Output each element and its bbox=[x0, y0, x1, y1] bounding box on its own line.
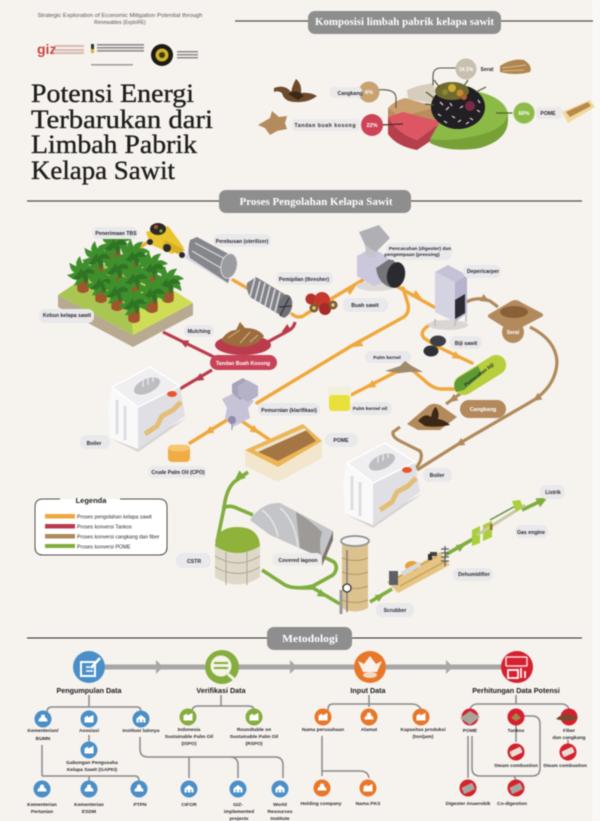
label: Covered lagoon bbox=[272, 553, 322, 566]
label: Pencacahan: pengempaan (pressing) bbox=[384, 252, 440, 258]
legend row: tan: Proses konversi cangkang dan fiber bbox=[77, 534, 160, 540]
node: Steam combustion 2 bbox=[543, 744, 587, 769]
heading: Proses bbox=[27, 190, 582, 213]
node: GIZ projects: implemented bbox=[224, 809, 254, 815]
node: GAPKI: Kelapa Sawit (GAPKI) bbox=[67, 767, 118, 773]
node: CIFOR: CIFOR bbox=[181, 802, 197, 808]
node: RSPO: Roundtable on bbox=[237, 727, 271, 733]
label: Perebusan: Perebusan (sterilizer) bbox=[216, 239, 269, 245]
logos bbox=[37, 41, 198, 66]
label: Boiler right bbox=[423, 468, 452, 482]
icon: tandan buah kosong bbox=[258, 111, 287, 135]
label: Crude Palm Oil bbox=[148, 466, 206, 478]
label: Boiler left: Boiler bbox=[87, 441, 101, 447]
label: Penerimaan TBS: Penerimaan TBS bbox=[95, 231, 137, 237]
label: Perebusan bbox=[213, 234, 271, 247]
legend: Legenda bbox=[76, 496, 107, 505]
node: Co-digestion bbox=[497, 780, 527, 807]
node: PTPN: PTPN bbox=[133, 802, 147, 808]
icon: buah sawit bbox=[306, 292, 338, 315]
pie chart: waste composition bbox=[258, 58, 595, 150]
node: Digester Anaerobik: Digester Anaerobik bbox=[446, 801, 491, 807]
heading: Proses: Proses Pengolahan Kelapa Sawit bbox=[240, 197, 393, 208]
tankos slice bbox=[388, 112, 441, 150]
label: Scrubber: Scrubber bbox=[384, 608, 406, 614]
node: Kapasitas produksi: (ton/jam) bbox=[413, 734, 434, 740]
node: POME: POME bbox=[463, 728, 478, 734]
icon: palm kernel pile bbox=[385, 361, 423, 373]
dehumidifier platform bbox=[387, 546, 450, 593]
callout: Tandan buah kosong bbox=[292, 114, 403, 136]
node: Kementerian Pertanian bbox=[27, 780, 57, 815]
node: Tankos: Tankos bbox=[508, 728, 525, 734]
node: CIFOR bbox=[180, 780, 198, 808]
node: Alamat bbox=[360, 708, 378, 733]
node: Institusi lainnya: Institusi lainnya bbox=[123, 728, 160, 734]
node: Fiber dan cangkang: Fiber bbox=[563, 728, 575, 734]
boiler right bbox=[343, 443, 422, 528]
tankos node: Tandan Buah Kosong bbox=[216, 361, 270, 367]
title: Potensi Energi bbox=[31, 78, 194, 108]
node: Kementerian Pertanian: Kementerian bbox=[27, 802, 57, 808]
callout: Tandan buah kosong: 22% bbox=[366, 123, 378, 129]
legend row: green: Proses konversi POME bbox=[77, 544, 131, 550]
label: Pemipilan: Pemipilan (thresher) bbox=[279, 277, 329, 283]
title: Terbarukan dari bbox=[31, 104, 213, 134]
callout: Cangkang: 6% bbox=[365, 90, 373, 96]
node: WRI bbox=[267, 780, 293, 821]
label: Crude Palm Oil: Crude Palm Oil (CPO) bbox=[151, 470, 205, 476]
icon: calculation bbox=[501, 651, 533, 683]
title: Limbah Pabrik bbox=[31, 129, 198, 159]
node: GIZ projects: GIZ- bbox=[233, 802, 243, 808]
machine: thresher bbox=[247, 277, 294, 319]
title: Kelapa Sawit bbox=[31, 155, 176, 185]
methodology: Input Data: Input Data bbox=[350, 686, 387, 695]
label: Depericarper bbox=[463, 265, 501, 278]
node: Kementerian/BUMN bbox=[28, 710, 59, 742]
label: Scrubber bbox=[376, 603, 414, 617]
methodology: Perhitungan Data Potensi bbox=[446, 651, 587, 807]
heading: Komposisi: Komposisi limbah pabrik kelapa sawit bbox=[315, 17, 495, 28]
label: Pencacahan bbox=[384, 243, 452, 260]
label: Palm kernel bbox=[365, 351, 411, 363]
label: Buah sawit: Buah sawit bbox=[351, 303, 379, 309]
icon: verification bbox=[205, 650, 239, 684]
green flows bbox=[217, 470, 550, 604]
methodology: Pengumpulan Data: Pengumpulan Data bbox=[56, 686, 123, 695]
node: Tankos bbox=[508, 708, 525, 734]
label: Listrik: Listrik bbox=[545, 490, 561, 496]
covered lagoon bbox=[250, 503, 333, 566]
pill: Pemecahan biji bbox=[450, 351, 510, 399]
node: Co-digestion: Co-digestion bbox=[497, 801, 527, 807]
label: Palm kernel oil: Palm kernel oil bbox=[353, 406, 388, 412]
cangkang node: Cangkang bbox=[470, 407, 496, 413]
machine: digester bbox=[356, 225, 408, 291]
node: ISPO: (ISPO) bbox=[182, 741, 197, 747]
node: Kementerian ESDM: ESDM bbox=[82, 809, 96, 815]
label: Pemipilan bbox=[276, 272, 333, 285]
label: Boiler right: Boiler bbox=[430, 473, 444, 479]
methodology arrows bbox=[105, 660, 502, 674]
node: Kementerian Pertanian: Pertanian bbox=[31, 809, 53, 815]
legend row: red: Proses konversi Tankos bbox=[77, 524, 132, 530]
logo: giz: giz bbox=[37, 41, 56, 57]
node: RSPO bbox=[230, 708, 279, 747]
icon: input bbox=[354, 651, 386, 683]
label: Buah sawit bbox=[343, 298, 388, 312]
heading: Metodologi: Metodologi bbox=[282, 634, 338, 645]
node: Steam combustion 1 bbox=[494, 744, 538, 769]
label: Mulching: Mulching bbox=[188, 329, 210, 335]
gas engine bbox=[472, 500, 525, 546]
node: Institusi lainnya bbox=[123, 710, 160, 734]
CSTR tank bbox=[215, 527, 260, 585]
plantation: Kebun kelapa sawit bbox=[39, 227, 193, 347]
label: Biji sawit: Biji sawit bbox=[455, 341, 478, 347]
callout: Cangkang: Cangkang bbox=[337, 91, 363, 97]
label: Penerimaan TBS bbox=[92, 227, 138, 239]
callout: Serat: 14.1% bbox=[459, 67, 474, 73]
label: Palm kernel: Palm kernel bbox=[373, 355, 401, 361]
pome slice bbox=[430, 90, 508, 150]
label: Palm kernel oil bbox=[350, 402, 392, 415]
icon: data collection bbox=[73, 651, 105, 683]
label: CSTR: CSTR bbox=[187, 559, 201, 565]
node: PTPN bbox=[130, 780, 148, 808]
node: Steam combustion 2: Steam combustion bbox=[543, 763, 587, 769]
label: Biji sawit bbox=[450, 336, 482, 349]
legend row: orange: Proses pengolahan kelapa sawit bbox=[77, 514, 152, 520]
red flows bbox=[163, 322, 295, 390]
node: Kementerian/BUMN: BUMN bbox=[36, 736, 51, 742]
node: RSPO: Sustainable Palm Oil bbox=[230, 734, 279, 740]
label: Depericarper: Depericarper bbox=[467, 269, 499, 275]
serat node bbox=[490, 302, 541, 343]
label: POME bbox=[325, 433, 358, 447]
process flow lines bbox=[127, 242, 557, 604]
node: GAPKI bbox=[66, 742, 118, 773]
heading: Metodologi bbox=[27, 627, 582, 650]
label: Pencacahan: Pencacahan (digester) dan bbox=[389, 246, 451, 252]
title bbox=[31, 78, 213, 185]
node: ISPO: Indonesia bbox=[178, 727, 201, 733]
label: Boiler left bbox=[80, 435, 110, 449]
plantation: Kebun kelapa sawit: Kebun kelapa sawit bbox=[43, 313, 91, 319]
methodology: Pengumpulan Data bbox=[27, 651, 293, 821]
node: Fiber dan cangkang: dan cangkang bbox=[553, 735, 585, 741]
node: Fiber dan cangkang bbox=[553, 708, 585, 741]
logo: giz bbox=[37, 41, 84, 57]
callout: POME: 60% bbox=[518, 111, 530, 117]
node: Digester Anaerobik bbox=[446, 780, 491, 807]
node: Asosiasi bbox=[79, 710, 100, 734]
serat node: Serat bbox=[507, 330, 520, 336]
logo: ministry emblem bbox=[151, 44, 198, 66]
icon: biji sawit bbox=[424, 336, 446, 356]
node: Kapasitas produksi: Kapasitas produksi bbox=[400, 727, 446, 733]
label: Pemurnian bbox=[258, 403, 320, 416]
methodology: Verifikasi Data: Verifikasi Data bbox=[196, 686, 247, 695]
palm fruit bunch bbox=[425, 80, 486, 129]
header: project name: Strategic Exploration of Economic Mitigation Potential through bbox=[38, 13, 203, 19]
callout: POME bbox=[496, 100, 595, 124]
serat slice bbox=[407, 83, 436, 104]
node: Kapasitas produksi bbox=[400, 708, 446, 740]
node: Asosiasi: Asosiasi bbox=[79, 728, 100, 734]
heading: Komposisi bbox=[235, 11, 593, 34]
node: Alamat: Alamat bbox=[361, 727, 378, 733]
callout: POME: POME bbox=[540, 111, 556, 117]
label: Gas engine bbox=[515, 525, 548, 538]
POME pond bbox=[245, 424, 322, 482]
label: Listrik bbox=[540, 485, 565, 499]
label: CSTR bbox=[176, 553, 211, 568]
machine: sterilizer bbox=[185, 237, 239, 284]
legend bbox=[35, 496, 167, 555]
node: Kementerian ESDM: Kementerian bbox=[74, 802, 104, 808]
node: Holding company bbox=[300, 780, 342, 807]
pill: Pemecahan biji: Pemecahan biji bbox=[463, 362, 496, 388]
machine: truck bbox=[146, 223, 185, 258]
callout: Serat bbox=[433, 58, 531, 85]
methodology: Input Data bbox=[300, 651, 446, 807]
label: Pemurnian: Pemurnian (klarifikasi) bbox=[261, 408, 317, 414]
logo: German ministry bbox=[91, 44, 144, 66]
icon: palm kernel oil glass bbox=[328, 387, 351, 411]
node: GIZ projects bbox=[224, 780, 254, 821]
icon: CPO cup bbox=[168, 444, 190, 462]
scrubber column bbox=[341, 536, 369, 614]
node: Nama PKS: Nama PKS bbox=[356, 801, 381, 807]
tankos node bbox=[210, 322, 277, 370]
node: Nama perusahaan bbox=[302, 708, 344, 733]
machine: depericarper bbox=[428, 265, 468, 330]
callout: Serat: Serat bbox=[481, 67, 494, 73]
header: project name: Renewables (ExploRE) bbox=[94, 20, 146, 26]
node: GAPKI: Gabungan Pengusaha bbox=[66, 760, 118, 766]
label: POME: POME bbox=[333, 438, 349, 444]
boiler left bbox=[108, 367, 187, 452]
node: Holding company: Holding company bbox=[300, 801, 342, 807]
node: WRI: Resources bbox=[267, 809, 293, 815]
cangkang node bbox=[407, 400, 506, 430]
label: Dehumidifier bbox=[453, 568, 493, 581]
cangkang slice bbox=[388, 98, 440, 122]
node: Steam combustion 1: Steam combustion bbox=[494, 763, 538, 769]
node: Kementerian ESDM bbox=[74, 780, 104, 815]
node: Nama PKS bbox=[356, 780, 381, 807]
node: POME bbox=[460, 708, 480, 734]
callout: Cangkang bbox=[330, 82, 396, 108]
methodology: Verifikasi Data bbox=[165, 650, 279, 747]
callout: Tandan buah kosong: Tandan buah kosong bbox=[294, 123, 356, 129]
tan flows bbox=[393, 294, 557, 470]
machine: clarifier bbox=[222, 378, 258, 430]
icon: cangkang bbox=[274, 79, 317, 102]
node: ISPO: Sustainable Palm Oil bbox=[165, 734, 214, 740]
label: Gas engine: Gas engine bbox=[517, 530, 545, 536]
orange flows bbox=[127, 242, 472, 443]
node: ISPO bbox=[165, 708, 214, 747]
node: Nama perusahaan: Nama perusahaan bbox=[302, 727, 344, 733]
node: Kementerian/BUMN: Kementerian/ bbox=[28, 728, 59, 734]
label: Covered lagoon: Covered lagoon bbox=[278, 558, 318, 564]
label: Mulching bbox=[184, 325, 214, 337]
node: WRI: World bbox=[273, 802, 287, 808]
methodology: Perhitungan Data Potensi: Perhitungan Data Potensi bbox=[472, 686, 560, 695]
node: RSPO: (RSPO) bbox=[245, 741, 263, 747]
header: project name bbox=[38, 13, 203, 26]
label: Dehumidifier: Dehumidifier bbox=[458, 572, 490, 578]
